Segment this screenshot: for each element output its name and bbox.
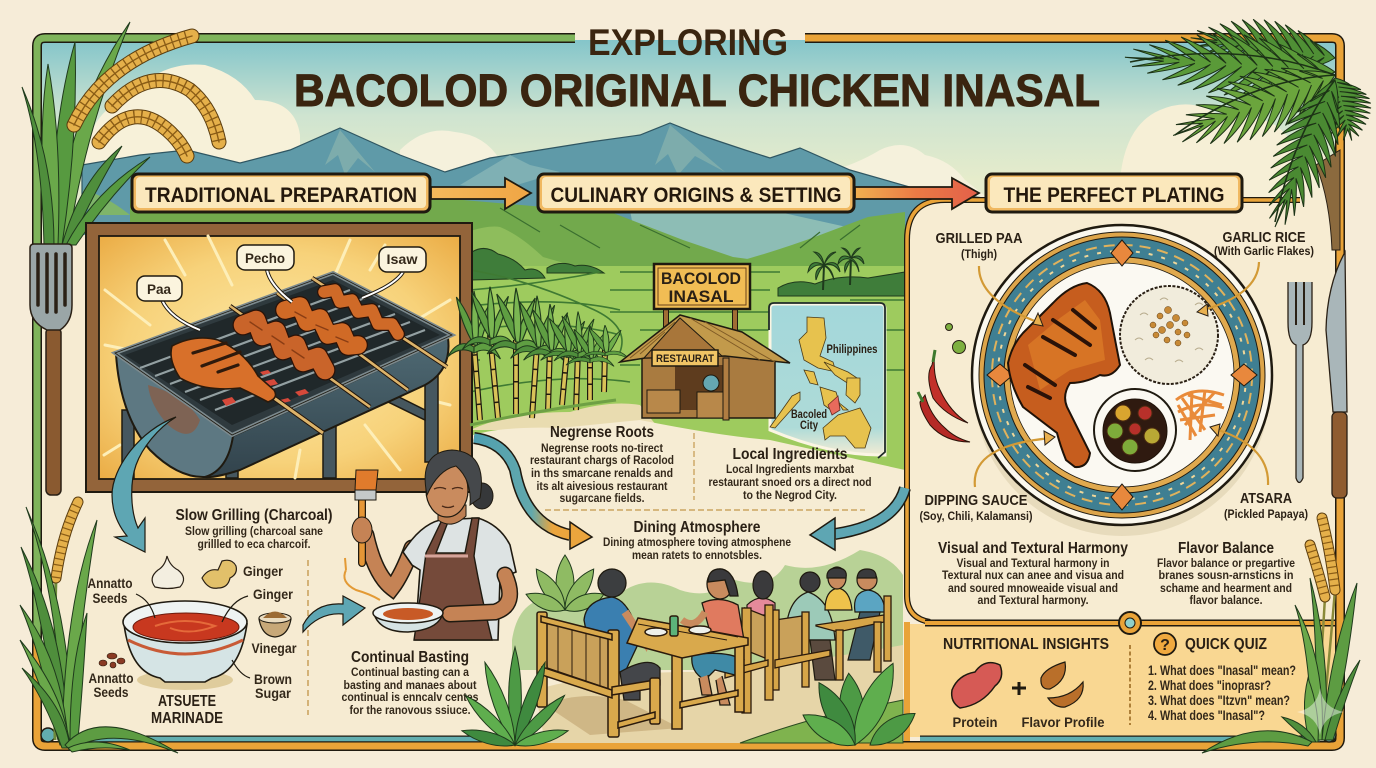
label: annatto seeds bottom — [88, 671, 134, 700]
label: annatto seeds top: Annatto — [88, 576, 132, 591]
garlic rice — [1120, 286, 1218, 384]
text: negrense roots: Negrense roots no-tirect — [541, 441, 663, 455]
illustration: woman basting — [344, 450, 516, 640]
raised arm — [366, 535, 412, 588]
icon: question mark badge: ? — [1160, 637, 1170, 654]
text: slow grilling — [176, 507, 332, 551]
text: quiz questions: 1. What does "Inasal" mean? — [1148, 663, 1296, 678]
plant: bottom right rice and grass — [1202, 518, 1360, 753]
map label philippines: Philippines — [826, 344, 878, 356]
label: annatto seeds bottom: Seeds — [94, 685, 128, 700]
dashed dividers center — [545, 433, 865, 510]
icon: marinade bowl — [123, 594, 250, 690]
label: annatto seeds top — [88, 576, 132, 606]
label: isaw — [362, 247, 426, 298]
label: atsuete marinade: MARINADE — [151, 710, 223, 727]
arrow: grill to marinade — [112, 417, 176, 552]
text: continual basting: Continual basting can a — [351, 665, 469, 679]
map label bacolod city — [791, 409, 827, 432]
lower panel left border — [904, 622, 910, 745]
text: negrense roots: in ths smarcane renalds and — [531, 466, 673, 480]
icon: flavor profile — [1041, 662, 1083, 707]
text: visual and textural harmony — [938, 540, 1128, 607]
text: quiz questions: 3. What does "Itzvn" mean? — [1148, 693, 1290, 708]
brush — [358, 500, 366, 563]
diner in blue shirt — [584, 569, 660, 700]
text: visual and textural harmony: Textural nux can anee and visua and — [942, 568, 1124, 582]
icon: ginger — [202, 560, 236, 588]
label: brown sugar — [254, 672, 292, 701]
text: local ingredients: Local Ingredients marxbat — [726, 462, 854, 476]
bamboo bench — [537, 612, 660, 737]
dashed divider left — [307, 560, 309, 715]
dipping sauce dish — [1094, 389, 1176, 471]
atsara — [1176, 390, 1224, 440]
left cream panel — [41, 235, 480, 740]
text: continual basting: continual is enncalv centes — [342, 690, 479, 704]
sign: restaurat: RESTAURAT — [656, 353, 714, 365]
grill grate — [115, 273, 452, 435]
icon: distant palms — [808, 248, 864, 290]
header: culinary origins: CULINARY ORIGINS & SETTING — [550, 184, 842, 207]
header: culinary origins — [538, 174, 854, 212]
text: flavor balance: Flavor Balance — [1178, 540, 1274, 557]
plant: bottom center right — [740, 658, 921, 754]
text: flavor balance: flavor balance. — [1190, 593, 1262, 607]
text: continual basting: for the ranovous ssiuce. — [350, 703, 470, 717]
label: brown sugar: Brown — [254, 672, 292, 687]
icon: spatula left — [30, 244, 72, 495]
text: negrense roots: Negrense Roots — [550, 424, 654, 441]
divider with medallion — [925, 612, 1335, 634]
text: local ingredients: Local Ingredients — [732, 446, 848, 463]
bamboo table — [627, 616, 748, 729]
text: quiz questions — [1148, 663, 1296, 723]
text: flavor balance: schame and hearment and — [1160, 581, 1292, 595]
title — [294, 22, 1100, 116]
icon: annatto seeds — [99, 653, 125, 668]
label: pecho: Pecho — [245, 251, 285, 266]
illustration: sugarcane field — [448, 287, 629, 425]
callout: atsara — [1210, 424, 1308, 521]
callout: dipping sauce: (Soy, Chili, Kalamansi) — [920, 511, 1033, 523]
label: atsuete marinade: ATSUETE — [158, 693, 216, 710]
sign: bacolod inasal: INASAL — [668, 287, 734, 306]
text: negrense roots: restaurant chargs of Racolod — [530, 453, 674, 467]
callout: grilled paa: (Thigh) — [961, 249, 997, 261]
label: annatto seeds top: Seeds — [92, 591, 128, 606]
plant: bottom left grass and grain — [20, 502, 178, 753]
center cream panel with path — [470, 420, 905, 744]
text: local ingredients: to the Negrod City. — [743, 488, 837, 502]
icon: protein steak — [952, 663, 1002, 708]
arrow: origins to plating — [855, 178, 979, 209]
callout: garlic rice: (With Garlic Flakes) — [1214, 246, 1314, 258]
lower right insights panel background — [908, 624, 1336, 737]
icon: palm fronds top right — [1123, 10, 1376, 250]
map label bacolod city: City — [800, 420, 818, 432]
text: dining atmosphere: mean ratets to ennotsbles. — [632, 548, 762, 562]
label: brown sugar: Sugar — [255, 686, 292, 701]
text: local ingredients — [708, 446, 872, 502]
icon: knife — [1326, 252, 1347, 498]
callout: grilled paa: GRILLED PAA — [936, 230, 1023, 247]
header: traditional preparation: TRADITIONAL PREPARATION — [145, 184, 417, 207]
panel: grilling scene in wooden frame — [86, 223, 472, 492]
map: philippines — [769, 303, 885, 458]
lower arm — [450, 575, 510, 614]
skewers — [230, 278, 447, 407]
callout: garlic rice: GARLIC RICE — [1222, 229, 1306, 246]
text: dining atmosphere: Dining Atmosphere — [634, 519, 761, 536]
label: paa — [137, 276, 200, 330]
header: perfect plating: THE PERFECT PLATING — [1004, 184, 1224, 207]
plant: bottom center left — [460, 647, 570, 751]
icon: chilies and kalamansi — [918, 324, 970, 442]
text: visual and textural harmony: Visual and Textural Harmony — [938, 540, 1128, 557]
label: flavor profile: Flavor Profile — [1022, 715, 1105, 730]
text: continual basting: Continual Basting — [351, 649, 469, 666]
text: flavor balance: Flavor balance or pregartive — [1157, 556, 1295, 570]
label: isaw: Isaw — [386, 252, 418, 267]
sign: restaurat — [652, 350, 718, 366]
callout: dipping sauce: DIPPING SAUCE — [924, 492, 1028, 509]
apron — [414, 518, 492, 640]
arrow: flow to dining from left — [474, 438, 592, 549]
sign: bacolod inasal: BACOLOD — [661, 269, 741, 288]
callout: garlic rice — [1197, 229, 1314, 316]
label: vinegar: Vinegar — [252, 641, 297, 656]
callout: atsara: ATSARA — [1240, 490, 1292, 507]
header: perfect plating — [986, 174, 1242, 212]
dashed divider insights — [1129, 645, 1131, 725]
text: slow grilling: Slow grilling (charcoal sane — [185, 524, 323, 538]
text: quiz questions: 4. What does "Inasal"? — [1148, 708, 1265, 723]
callout: grilled paa — [936, 230, 1043, 326]
text: flavor balance — [1157, 540, 1295, 607]
far table and benches — [725, 596, 891, 713]
arrow: flow to dining from right — [810, 488, 905, 550]
chicken leg on grill — [267, 393, 323, 433]
scenic background: sky, clouds, mountains and fields — [40, 40, 1338, 476]
text: flavor balance: branes sousn-arnsticns in — [1158, 568, 1294, 582]
label: atsuete marinade — [151, 693, 223, 727]
illustration: outdoor dining scene — [512, 550, 903, 743]
sign: bacolod inasal — [654, 264, 750, 309]
heading: quick quiz: QUICK QUIZ — [1185, 636, 1267, 653]
arrow: marinade to basting — [303, 596, 365, 632]
text: negrense roots: sugarcane fields. — [560, 491, 644, 505]
label: annatto seeds bottom: Annatto — [88, 671, 134, 686]
background diners — [747, 567, 885, 680]
callout: dipping sauce — [920, 431, 1055, 523]
icon: brown sugar dish — [259, 612, 291, 637]
header: traditional preparation — [132, 174, 430, 212]
title kicker: EXPLORING — [588, 22, 788, 63]
text: slow grilling: grillled to eca charcoif. — [198, 537, 310, 551]
grill legs — [122, 367, 438, 478]
icon: sparkle watermark — [1297, 688, 1344, 735]
main title: BACOLOD ORIGINAL CHICKEN INASAL — [294, 65, 1100, 116]
diner in red shirt — [682, 569, 744, 705]
text: continual basting: basting and manaes about — [344, 678, 477, 692]
text: negrense roots — [530, 424, 674, 505]
callout: atsara: (Pickled Papaya) — [1224, 509, 1308, 521]
illustration: restaurant hut with sign — [620, 264, 790, 420]
label: paa: Paa — [147, 282, 171, 297]
heading: nutritional insights: NUTRITIONAL INSIGHTS — [943, 636, 1109, 653]
text: visual and textural harmony: and soured mnoweaide visual and — [948, 581, 1118, 595]
text: dining atmosphere — [603, 519, 791, 562]
icon: garlic — [152, 556, 184, 588]
label: protein: Protein — [952, 715, 998, 730]
label: ginger 2: Ginger — [253, 587, 294, 602]
barrel grill body — [205, 338, 449, 477]
arrow: preparation to origins — [431, 178, 531, 209]
right cream panel — [905, 200, 1336, 624]
text: visual and textural harmony: Visual and Textural harmony in — [956, 556, 1110, 570]
shirt — [403, 518, 516, 640]
icon: question mark badge — [1154, 633, 1176, 655]
text: continual basting — [342, 649, 479, 717]
label: pecho — [237, 245, 294, 302]
text: local ingredients: restaurant snoed ors a direct nod — [708, 475, 872, 489]
plate with inasal meal — [972, 225, 1272, 536]
map label bacolod city: Bacoled — [791, 409, 827, 421]
text: quiz questions: 2. What does "inoprasr? — [1148, 678, 1271, 693]
label: ginger 1: Ginger — [243, 564, 284, 579]
text: slow grilling: Slow Grilling (Charcoal) — [176, 507, 332, 524]
icon: plus — [1012, 682, 1026, 695]
text: visual and textural harmony: and Textural harmony. — [978, 593, 1088, 607]
text: negrense roots: its alt aivesious restaurant — [536, 479, 668, 493]
text: dining atmosphere: Dining atmosphere toving atmosphene — [603, 535, 791, 549]
icon: fork — [1288, 282, 1312, 482]
icon: rice stalks top left — [22, 22, 219, 245]
chicken thigh — [1008, 283, 1120, 467]
